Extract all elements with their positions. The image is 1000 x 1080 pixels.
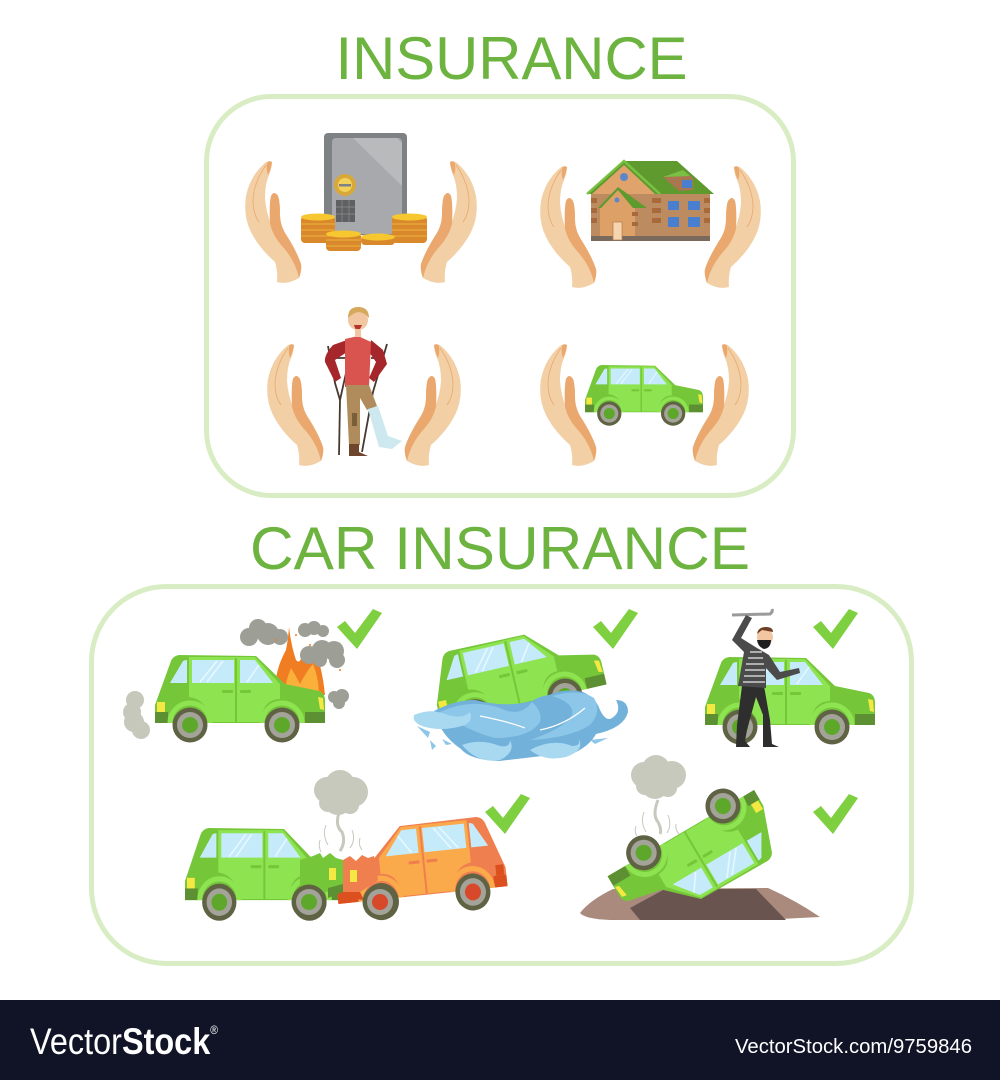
footer logo: ® bbox=[210, 1023, 218, 1037]
icon: car in flood bbox=[414, 618, 628, 761]
icon: car in hands bbox=[540, 344, 749, 466]
icon: check mark bbox=[485, 794, 530, 834]
panel: car insurance risks bbox=[92, 586, 912, 964]
icon: house in hands bbox=[540, 161, 761, 288]
icon: check mark bbox=[813, 794, 858, 834]
title: insurance: INSURANCE bbox=[336, 25, 688, 92]
icon: car on fire bbox=[123, 619, 349, 742]
footer logo: VectorStock bbox=[30, 1021, 223, 1062]
icon: overturned car in pit bbox=[580, 755, 820, 935]
panel: insurance types bbox=[206, 96, 794, 496]
footer bar bbox=[0, 1000, 1000, 1080]
icon: injured man in hands bbox=[267, 307, 461, 466]
icon: check mark bbox=[813, 609, 858, 649]
footer url: VectorStock.com/9759846 bbox=[735, 1036, 972, 1058]
icon: check mark bbox=[593, 609, 638, 649]
icon: thief breaking into car bbox=[705, 609, 875, 747]
icon: safe and coins in hands bbox=[245, 133, 477, 283]
title: car insurance: CAR INSURANCE bbox=[250, 515, 750, 582]
icon: two cars collision bbox=[185, 770, 510, 925]
icon: check mark bbox=[337, 609, 382, 649]
